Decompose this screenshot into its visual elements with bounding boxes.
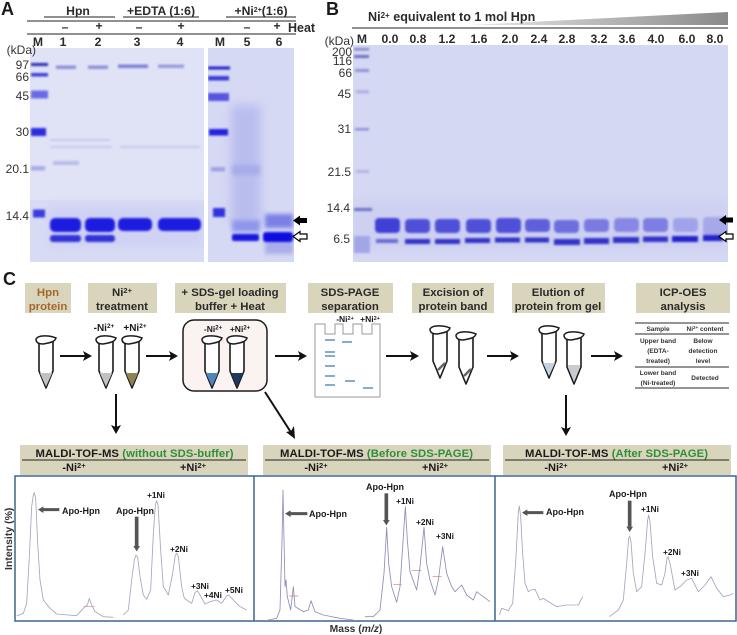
step label: Excision: Excision of [423, 287, 484, 299]
header: MALDI after SDS-PAGE [503, 445, 731, 475]
panel: spectra frame [15, 476, 736, 621]
header: MALDI without SDS-buffer: 2+ [77, 461, 86, 470]
header: MALDI without SDS-buffer [20, 445, 248, 475]
lane labels B: 8.0 [707, 32, 724, 46]
chart: spectrum without SDS-buffer: +2Ni [170, 544, 188, 554]
header: MALDI after SDS-PAGE: -Ni [544, 462, 559, 474]
step label: ICP-OES: ICP-OES [660, 287, 707, 299]
lane headers A: + [177, 19, 185, 33]
lane headers A: – [136, 20, 143, 34]
lane headers A: 2 [95, 35, 102, 49]
header: MALDI before SDS-PAGE: +Ni [422, 462, 439, 474]
diagram: SDS-PAGE gel: 2+ [348, 316, 354, 322]
lane labels B: 3.6 [619, 32, 636, 46]
lane headers A: 1 [60, 35, 67, 49]
step label: SDS loading buffer: + SDS-gel loading [181, 287, 279, 299]
table: ICP-OES results: Below [693, 338, 714, 345]
molecular weight ladder B: 200 [332, 45, 352, 59]
panel: SDS-treated tubes box: +Ni [230, 324, 243, 334]
table: ICP-OES results: (Ni-treated) [641, 380, 675, 387]
chart: spectrum after SDS-PAGE: +1Ni [641, 504, 659, 514]
chart: spectrum without SDS-buffer: +4Ni [204, 590, 222, 600]
chart: spectrum after SDS-PAGE: +2Ni [663, 547, 681, 557]
panel letter C: C [3, 269, 16, 289]
arrow: upper band A [293, 216, 307, 226]
molecular weight ladder A: 30 [16, 125, 29, 139]
arrow: lower band B [719, 232, 733, 242]
chart: spectrum after SDS-PAGE: Apo-Hpn [546, 507, 584, 517]
chart: spectrum without SDS-buffer: Apo-Hpn [116, 506, 154, 516]
header: MALDI after SDS-PAGE: MALDI-TOF-MS (After SDS-PAGE) [525, 448, 708, 460]
y axis label: Intensity (%) [3, 508, 15, 570]
lane labels B: 2.4 [531, 32, 548, 46]
chart: spectrum after SDS-PAGE [499, 489, 733, 617]
molecular weight ladder A: 20.1 [6, 162, 29, 176]
lane headers A: (1:6) [262, 4, 288, 18]
icon: excision tube 2 [456, 332, 476, 384]
panel: C workflow [3, 269, 730, 439]
labels: minus and plus Ni: -Ni [94, 323, 107, 334]
molecular weight ladder B: 6.5 [333, 232, 350, 246]
panel: SDS-treated tubes box: 2+ [243, 326, 251, 332]
panel: SDS-treated tubes box [183, 320, 267, 391]
step label: SDS-PAGE [308, 283, 393, 313]
step label: Hpn protein: protein [29, 301, 67, 313]
header: MALDI before SDS-PAGE: MALDI-TOF-MS (Before SDS-PAGE) [280, 448, 473, 460]
x axis label: Mass (m/z) [330, 624, 382, 635]
step label: Ni treatment: Ni [112, 287, 123, 299]
step label: Ni treatment: treatment [96, 301, 148, 313]
step label: Elution [512, 283, 605, 313]
header: MALDI without SDS-buffer: 2+ [197, 461, 207, 470]
diagram: SDS-PAGE gel: -Ni [336, 314, 348, 324]
diagram: SDS-PAGE gel [315, 314, 380, 397]
diagram: SDS-PAGE gel: 2+ [374, 316, 380, 322]
header: MALDI without SDS-buffer: +Ni [180, 462, 197, 474]
header: MALDI after SDS-PAGE: 2+ [679, 461, 689, 470]
molecular weight ladder B: 45 [338, 87, 351, 101]
lane headers A: 6 [276, 35, 283, 49]
lane labels B: 2.0 [502, 32, 519, 46]
lane labels B [357, 32, 724, 46]
chart: spectrum before SDS-PAGE: Apo-Hpn [366, 482, 404, 492]
step label: SDS loading buffer: buffer + Heat [195, 301, 265, 313]
gel A left [30, 48, 204, 262]
chart: spectrum without SDS-buffer: Apo-Hpn [62, 506, 100, 516]
chart: spectrum before SDS-PAGE: Apo-Hpn [309, 509, 347, 519]
panel: SDS-treated tubes box: 2+ [215, 326, 223, 332]
chart: spectrum without SDS-buffer: +5Ni [225, 585, 243, 595]
table: ICP-OES results: level [696, 358, 710, 365]
table: ICP-OES results: Ni [687, 326, 693, 333]
step label: Elution: protein from gel [515, 301, 601, 313]
icon: plus Ni tube [122, 336, 142, 388]
molecular weight ladder B: 21.5 [328, 165, 351, 179]
icon: excision tube 1 [430, 326, 450, 378]
icon: elution tube 1 [539, 326, 559, 378]
molecular weight ladder A: 45 [16, 89, 29, 103]
icon: Hpn tube [36, 336, 56, 388]
chart: spectrum without SDS-buffer: +3Ni [191, 581, 209, 591]
lane headers A: 5 [244, 35, 251, 49]
table: ICP-OES results [635, 323, 729, 388]
table: ICP-OES results: Lower band [640, 370, 676, 377]
chart: spectrum after SDS-PAGE: +3Ni [681, 568, 699, 578]
table: ICP-OES results: detection [689, 348, 717, 355]
header: MALDI before SDS-PAGE: 2+ [319, 461, 328, 470]
step label: Ni treatment: 2+ [123, 286, 133, 295]
labels: minus and plus Ni: 2+ [107, 323, 115, 330]
step label: ICP-OES: analysis [661, 301, 705, 313]
lane labels B: 4.0 [648, 32, 665, 46]
lane headers A [27, 4, 316, 49]
table: ICP-OES results: Upper band [640, 338, 676, 345]
header: MALDI without SDS-buffer: MALDI-TOF-MS (without SDS-buffer) [36, 448, 234, 460]
panel: SDS-treated tubes box: -Ni [204, 324, 215, 334]
lane headers A: – [62, 20, 69, 34]
chart: spectrum after SDS-PAGE: Apo-Hpn [609, 489, 647, 499]
molecular weight ladder A: 97 [16, 58, 29, 72]
labels: minus and plus Ni: +Ni [123, 323, 139, 334]
lane labels B: 0.0 [382, 32, 399, 46]
lane labels B: 3.2 [591, 32, 608, 46]
arrows: workflow [60, 351, 623, 439]
lane headers A: +Ni [234, 4, 254, 18]
gel B [353, 45, 728, 262]
lane labels B: 6.0 [679, 32, 696, 46]
icon: elution tube 2 [564, 332, 584, 384]
lane headers A: M [33, 35, 43, 49]
step label: SDS-PAGE: SDS-PAGE [321, 287, 380, 299]
header: MALDI after SDS-PAGE: 2+ [559, 461, 568, 470]
step label: Ni treatment [88, 283, 157, 313]
header: MALDI without SDS-buffer: -Ni [62, 462, 77, 474]
arrow: upper band B [719, 215, 733, 225]
chart: spectrum before SDS-PAGE: +1Ni [396, 496, 414, 506]
heading B: equivalent to 1 mol Hpn [390, 10, 535, 24]
table: ICP-OES results: content [698, 326, 724, 333]
lane labels B: 1.6 [471, 32, 488, 46]
lane headers A: +EDTA (1:6) [127, 4, 195, 18]
lane headers A: 3 [134, 35, 141, 49]
step label: SDS loading buffer [175, 283, 286, 313]
labels: minus and plus Ni [94, 323, 147, 334]
step label: Excision [412, 283, 494, 313]
lane labels B: 1.2 [439, 32, 456, 46]
heading B: 2+ [381, 11, 390, 20]
lane labels B: 2.8 [559, 32, 576, 46]
chart: spectrum without SDS-buffer: +1Ni [147, 490, 165, 500]
lane headers A: 4 [177, 35, 184, 49]
lane headers A: Hpn [66, 4, 90, 18]
molecular weight ladder B: 66 [339, 66, 352, 80]
chart: spectrum before SDS-PAGE: +2Ni [416, 517, 434, 527]
heading B: Ni [368, 10, 381, 24]
header: MALDI before SDS-PAGE [263, 445, 491, 475]
arrow: lower band A [293, 232, 307, 242]
molecular weight ladder A: 14.4 [6, 209, 29, 223]
step label: Hpn protein: Hpn [37, 287, 59, 299]
wedge: increasing Ni concentration [470, 12, 728, 25]
molecular weight ladder A: (kDa) [7, 43, 36, 57]
table: ICP-OES results: Sample [646, 326, 670, 333]
lane headers A: 2+ [254, 7, 262, 14]
table: ICP-OES results: treated) [646, 358, 670, 365]
molecular weight ladder A: 66 [16, 70, 29, 84]
icon: minus Ni tube [96, 336, 116, 388]
step label: Excision: protein band [419, 301, 488, 313]
step label: ICP-OES [636, 283, 730, 313]
molecular weight ladder A [6, 43, 36, 223]
lane labels B: 0.8 [410, 32, 427, 46]
chart: spectrum without SDS-buffer [17, 490, 247, 617]
header: MALDI before SDS-PAGE: 2+ [439, 461, 449, 470]
molecular weight ladder B: (kDa) [325, 34, 354, 48]
lane labels B: M [357, 32, 367, 46]
chart: spectrum before SDS-PAGE [268, 482, 490, 620]
chart: spectrum before SDS-PAGE: +3Ni [436, 531, 454, 541]
table: ICP-OES results: (EDTA- [647, 348, 669, 355]
lane headers A: + [273, 19, 281, 33]
labels: minus and plus Ni: 2+ [139, 323, 147, 330]
molecular weight ladder B: 116 [333, 54, 352, 68]
panel: B Ni titration gel [325, 0, 733, 262]
molecular weight ladder B: 14.4 [327, 201, 350, 215]
lane headers A: Heat [288, 21, 316, 35]
lane headers A: M [215, 35, 225, 49]
header: MALDI after SDS-PAGE: +Ni [662, 462, 679, 474]
molecular weight ladder B [325, 34, 354, 246]
gel A right [208, 48, 294, 262]
step label: Elution: Elution of [532, 287, 584, 299]
step label: SDS-PAGE: separation [321, 301, 379, 313]
step label: Hpn protein [25, 283, 71, 313]
lane headers A: + [95, 19, 103, 33]
molecular weight ladder B: 31 [338, 122, 351, 136]
diagram: SDS-PAGE gel: +Ni [360, 314, 374, 324]
table: ICP-OES results: 2+ [693, 325, 699, 330]
panel: A gel electrophoresis [1, 0, 316, 262]
lane headers A: – [244, 20, 251, 34]
table: ICP-OES results: Detected [691, 375, 719, 382]
header: MALDI before SDS-PAGE: -Ni [304, 462, 319, 474]
